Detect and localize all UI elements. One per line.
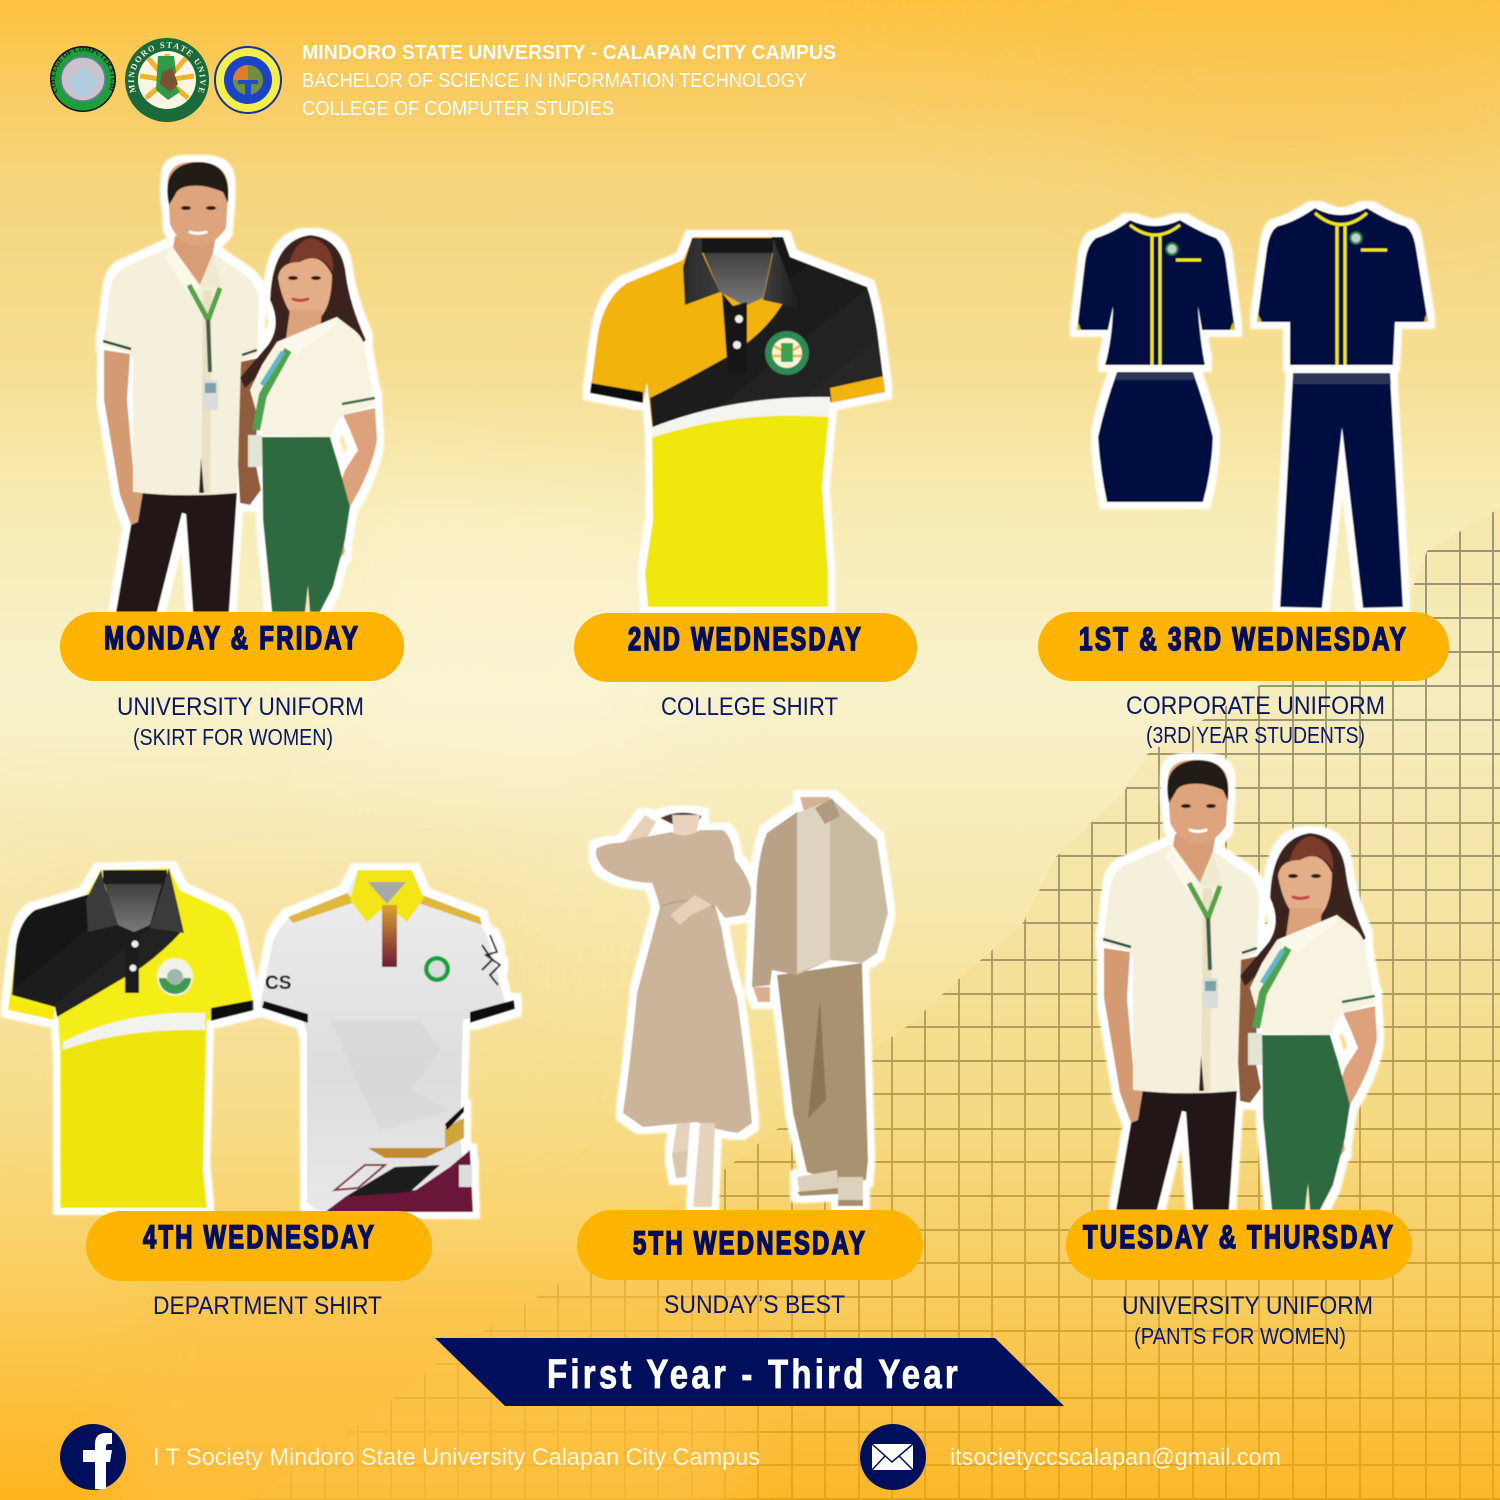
figure: sunday's best couple [596, 797, 888, 1207]
header text: COLLEGE OF COMPUTER STUDIES [302, 98, 614, 120]
pill: 1st and 3rd wednesday [1038, 612, 1449, 681]
logo: information technology [215, 47, 281, 113]
men's jacket and pants [1257, 208, 1428, 608]
pill: tuesday and thursday: TUESDAY & THURSDAY [1083, 1219, 1395, 1255]
pill: 4th wednesday [86, 1211, 432, 1281]
caption: university uniform skirt: (SKIRT FOR WOMEN) [133, 724, 333, 750]
icon: email [860, 1424, 926, 1490]
figure: university uniform couple, pants [1103, 760, 1377, 1210]
pill: 4th wednesday: 4TH WEDNESDAY [143, 1219, 376, 1255]
figure: department shirt, white [260, 870, 515, 1212]
shirt badge [157, 958, 193, 996]
pill: 2nd wednesday: 2ND WEDNESDAY [628, 621, 863, 657]
caption: corporate uniform [1126, 692, 1385, 748]
pill: tuesday and thursday [1066, 1210, 1412, 1280]
footer text: email address: itsocietyccscalapan@gmail.com [950, 1444, 1281, 1471]
caption: sunday's best: SUNDAY’S BEST [664, 1291, 845, 1319]
caption: department shirt: DEPARTMENT SHIRT [153, 1292, 382, 1320]
caption: university uniform skirt [117, 693, 364, 750]
pill: 2nd wednesday [574, 613, 917, 682]
caption: university uniform pants: UNIVERSITY UNIFORM [1122, 1292, 1373, 1320]
banner: first year to third year: First Year - Third Year [547, 1351, 961, 1397]
pill: monday and friday [60, 612, 404, 681]
women's jacket and skirt [1077, 220, 1235, 502]
figure: department shirt, black and yellow [8, 868, 255, 1208]
logo: college of computer studies [50, 46, 116, 112]
pill: 5th wednesday [577, 1210, 923, 1280]
icon: facebook [60, 1424, 126, 1490]
caption: university uniform pants: (PANTS FOR WOMEN) [1134, 1323, 1346, 1349]
caption: corporate uniform: (3RD YEAR STUDENTS) [1146, 722, 1365, 748]
header text: MINDORO STATE UNIVERSITY - CALAPAN CITY CAMPUS [302, 42, 836, 64]
banner: first year to third year [435, 1338, 1064, 1406]
caption: college shirt: COLLEGE SHIRT [661, 693, 838, 721]
header text: BACHELOR OF SCIENCE IN INFORMATION TECHNOLOGY [302, 70, 807, 92]
pill: monday and friday: MONDAY & FRIDAY [104, 620, 360, 656]
pill: 5th wednesday: 5TH WEDNESDAY [633, 1225, 867, 1261]
caption: university uniform skirt: UNIVERSITY UNIFORM [117, 693, 364, 721]
logo: mindoro state university [125, 38, 209, 122]
header text [302, 42, 836, 120]
figure: corporate uniform [1077, 208, 1428, 608]
figure: university uniform couple, skirt [103, 162, 377, 612]
footer text: facebook page: I T Society Mindoro State University Calapan City Campus [153, 1444, 760, 1471]
sleeve lettering: CS [265, 973, 291, 994]
header logos [50, 38, 282, 122]
caption: university uniform pants [1122, 1292, 1373, 1349]
caption: corporate uniform: CORPORATE UNIFORM [1126, 692, 1385, 720]
figure: college shirt [585, 230, 900, 610]
man in tan jacket [752, 797, 888, 1206]
shirt badge [765, 331, 809, 375]
woman in beige dress [596, 812, 752, 1207]
